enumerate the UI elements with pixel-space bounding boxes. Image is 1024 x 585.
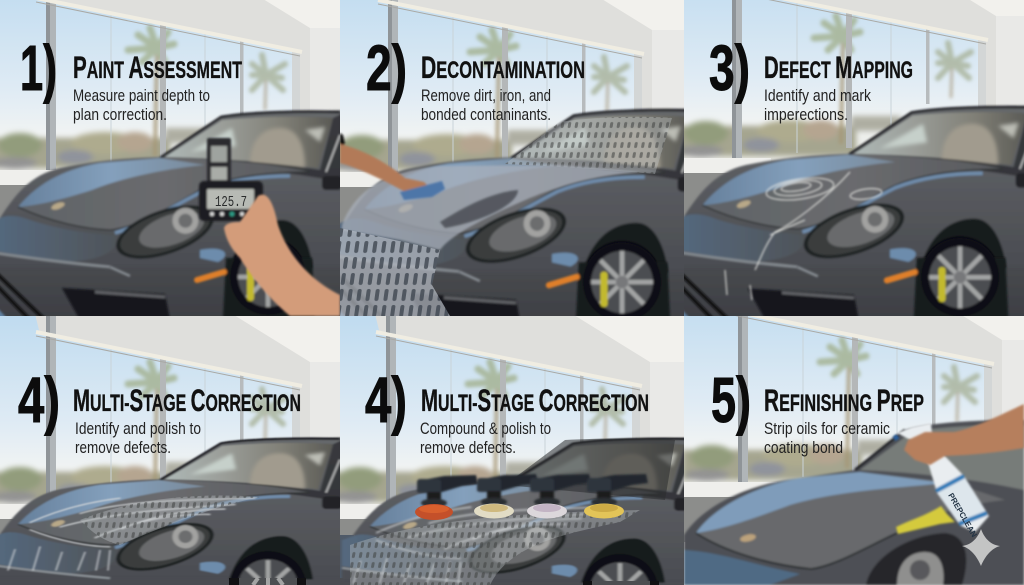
panel: 6 refinishing prep	[684, 316, 1024, 585]
icon: spray bottle	[894, 423, 989, 532]
icon: arm with wash mitt	[340, 133, 445, 200]
heading: defect mapping: DEFECT MAPPING	[764, 49, 913, 85]
car close-up	[684, 420, 1024, 585]
step 2 label	[366, 32, 585, 124]
panel: 1 paint assessment	[0, 0, 340, 316]
gauge reading: 125.7	[215, 194, 247, 211]
description 6 line 1: Strip oils for ceramic	[764, 419, 890, 438]
icon: paint depth gauge	[199, 138, 263, 221]
step 4 label	[18, 364, 301, 457]
wheel lower edge	[583, 581, 659, 585]
panel: 3 defect mapping	[684, 0, 1024, 316]
foam sheet on hood	[342, 165, 640, 250]
step 4 second label	[365, 364, 649, 457]
foam streaks	[353, 507, 613, 583]
step number 4: 4)	[18, 364, 60, 436]
description 4 line 2: remove defects.	[75, 438, 171, 457]
step number 5: 5)	[711, 364, 751, 436]
step number 3: 3)	[709, 32, 750, 104]
heading: refinishing prep: REFINISHING PREP	[764, 382, 924, 418]
description 3 line 1: Identify and mark	[764, 86, 871, 105]
dark hood blotch	[440, 190, 518, 228]
foam on hood	[80, 496, 260, 545]
foam on windshield	[505, 117, 672, 174]
step 1 label	[20, 32, 242, 124]
panel: 2 decontamination	[340, 0, 684, 316]
dark windshield	[505, 438, 675, 500]
description 2 line 1: Remove dirt, iron, and	[421, 86, 551, 105]
heading: multi-stage correction repeat: MULTI-STAGE CORRECTION	[421, 382, 649, 418]
description 6 line 2: coating bond	[764, 438, 843, 457]
icon: yellow microfibre cloth	[896, 506, 955, 534]
description 1 line 1: Measure paint depth to	[73, 86, 210, 105]
step number 1: 1)	[20, 32, 57, 104]
heading: paint assessment: PAINT ASSESSMENT	[73, 49, 242, 85]
polisher: yellow pad	[584, 474, 648, 518]
description 4 line 1: Identify and polish to	[75, 419, 201, 438]
step 5 label	[711, 364, 924, 457]
polisher: red pad	[415, 475, 478, 520]
bottle label text: PREPCLEAN	[946, 492, 979, 539]
polisher: lavender pad	[527, 474, 591, 518]
step 3 label	[709, 32, 913, 124]
description 5 line 2: remove defects.	[420, 438, 516, 457]
panel: 5 multi-stage correction, compound	[340, 316, 684, 585]
foam streaks on bumper	[340, 228, 450, 316]
step number 2: 2)	[366, 32, 407, 104]
description 1 line 2: plan correction.	[73, 105, 167, 124]
description 5 line 1: Compound & polish to	[420, 419, 551, 438]
defect swirl marks	[725, 172, 883, 300]
wheel lower edge	[229, 578, 306, 585]
polisher: cream pad	[474, 474, 538, 518]
step number 4 repeat: 4)	[365, 364, 407, 436]
dark hood foam texture	[350, 510, 640, 585]
swirl foam streaks	[8, 498, 255, 570]
description 2 line 2: bonded contaninants.	[421, 105, 551, 124]
icon: hand and forearm	[904, 404, 1024, 465]
panel: 4 multi-stage correction, identify	[0, 316, 340, 585]
icon: sparkle watermark	[962, 529, 1000, 566]
description 3 line 2: imperections.	[764, 105, 848, 124]
heading: decontamination: DECONTAMINATION	[421, 49, 585, 85]
icon: hand holding gauge	[224, 195, 340, 316]
heading: multi-stage correction: MULTI-STAGE CORRECTION	[73, 382, 301, 418]
